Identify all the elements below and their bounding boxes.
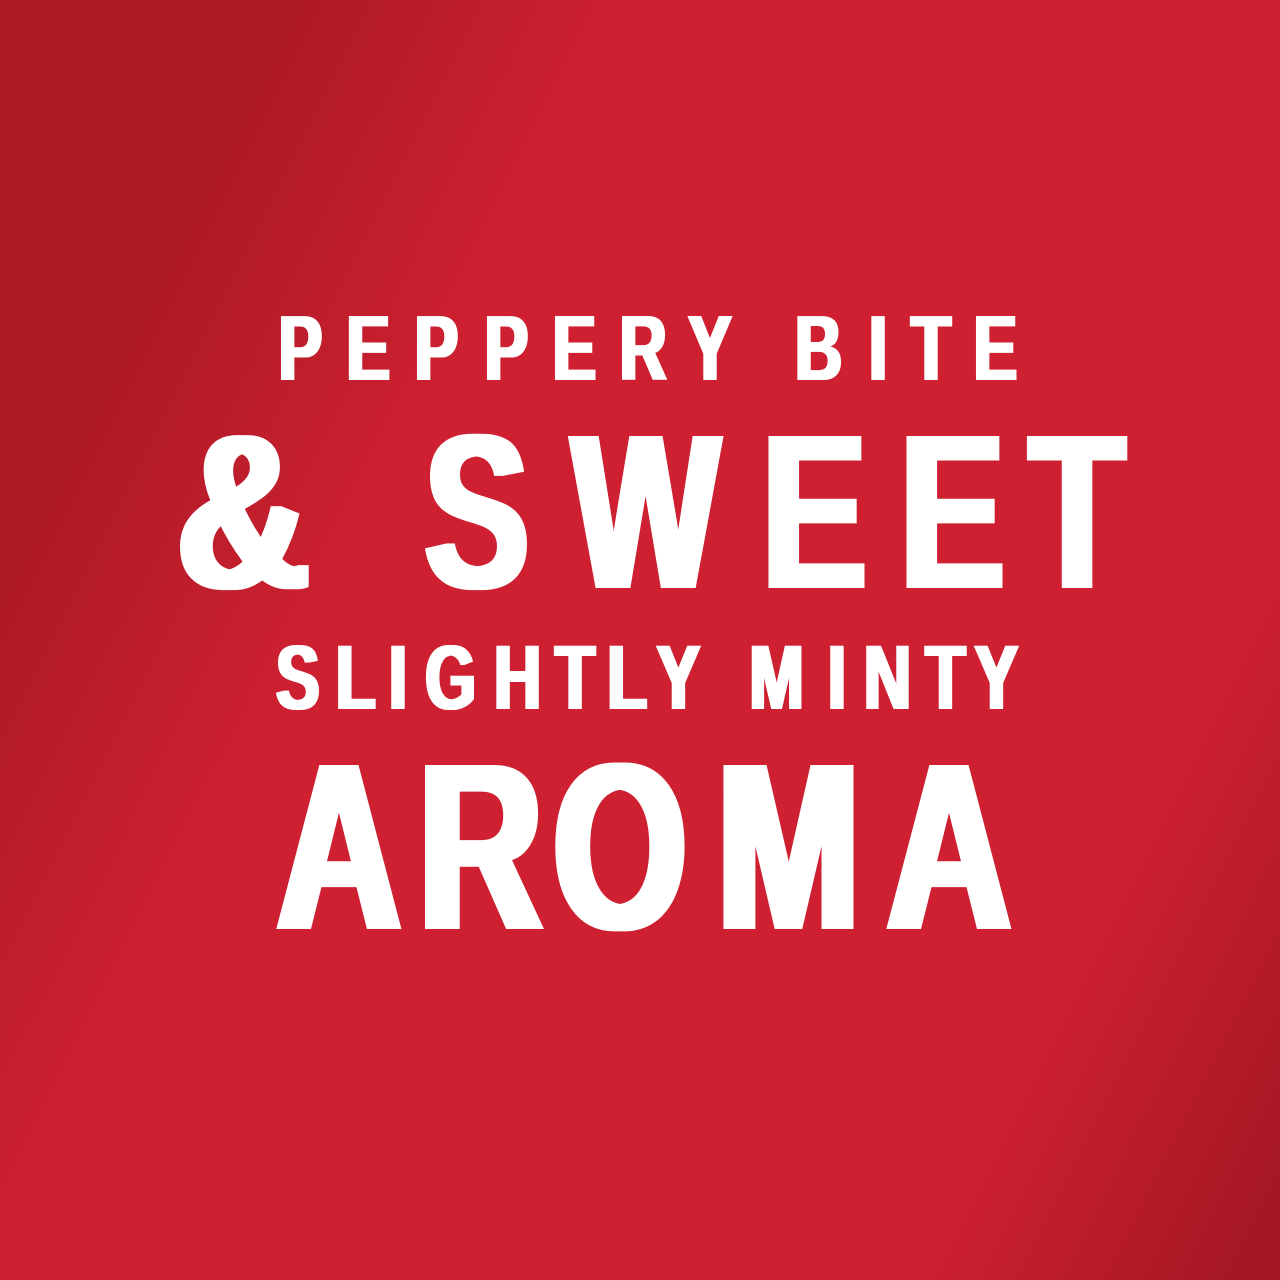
line: Aroma: AROMA bbox=[277, 714, 1011, 981]
line: Peppery Bite: PEPPERY BITE bbox=[279, 297, 1017, 401]
line: & Sweet bbox=[177, 389, 1125, 636]
line: Slightly Minty: SLIGHTLY MINTY bbox=[276, 626, 1018, 729]
heading text block bbox=[177, 297, 1125, 981]
word: Sweet: SWEET bbox=[424, 389, 1125, 635]
ampersand: & bbox=[177, 389, 309, 636]
